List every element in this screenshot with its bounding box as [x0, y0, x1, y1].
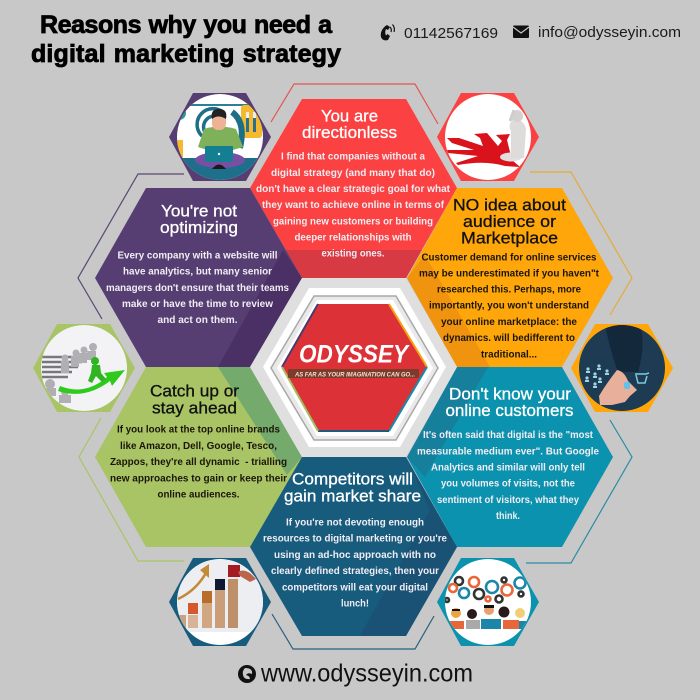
- heading: directionless: [302, 124, 397, 142]
- icon: rising bar chart: [169, 558, 271, 646]
- blue hexagon: [250, 457, 458, 637]
- logo hexagon: [282, 304, 427, 431]
- body text: think.: [496, 511, 520, 522]
- title: digital marketing strategy: [31, 40, 341, 68]
- body text: [256, 152, 451, 260]
- body text: deeper relationships with: [294, 232, 412, 244]
- panel: you're not optimizing: [95, 188, 303, 368]
- title: [31, 11, 341, 68]
- body text: using an ad-hoc approach with no: [274, 550, 436, 561]
- panel: catch up or stay ahead: [95, 367, 303, 547]
- body text: have analytics, but many senior: [123, 266, 272, 278]
- icon: person with laptop: [169, 93, 271, 181]
- heading: audience or: [463, 213, 557, 231]
- connector outlines: [78, 84, 632, 649]
- heading: optimizing: [160, 219, 238, 237]
- panel: you are directionless: [250, 99, 458, 280]
- heading: [453, 196, 566, 248]
- body text: I find that companies without a: [281, 152, 426, 162]
- orange hexagon: [407, 188, 614, 368]
- body text: researched this. Perhaps, more: [437, 284, 582, 296]
- red hexagon: [250, 99, 458, 280]
- body text: you volumes of visits, not the: [441, 478, 576, 490]
- body text: clearly defined strategies, then your: [271, 566, 439, 577]
- body text: [419, 252, 600, 360]
- icon: hand selecting customers: [571, 324, 673, 412]
- teal hexagon: [407, 367, 614, 547]
- heading: You're not: [161, 202, 237, 220]
- heading: gain market share: [284, 488, 421, 506]
- body text: don't have a clear strategic goal for what: [256, 184, 451, 195]
- body text: digital strategy (and many that do): [271, 168, 435, 179]
- heading: NO idea about: [453, 196, 566, 214]
- heading: [302, 108, 397, 142]
- body text: Customer demand for online services: [422, 252, 597, 264]
- email address: info@odysseyin.com: [538, 25, 681, 41]
- icon: green runner on arrow: [33, 324, 135, 412]
- panel: competitors will gain market share: [250, 457, 458, 637]
- contact: phone: [381, 24, 498, 42]
- heading: Competitors will: [292, 470, 413, 488]
- heading: [160, 202, 238, 237]
- heading: Catch up or: [150, 382, 240, 400]
- body text: new approaches to gain or keep their: [110, 474, 287, 484]
- body text: may be underestimated if you haven"t: [419, 268, 600, 280]
- icon: people and gears: [437, 558, 539, 646]
- panel: centre logo: [250, 278, 457, 457]
- panel: no idea about audience or marketplace: [407, 188, 614, 368]
- body text: If you're not devoting enough: [286, 518, 424, 528]
- body text: Every company with a website will: [118, 250, 278, 262]
- body text: Analytics and similar will only tell: [431, 462, 585, 474]
- heading: [284, 470, 421, 506]
- tagline band: [288, 369, 419, 378]
- body text: your online marketplace: the: [441, 317, 578, 328]
- logo wordmark: ODYSSEY: [299, 340, 410, 368]
- body text: It's often said that digital is the "most: [423, 430, 594, 441]
- tagline band: AS FAR AS YOUR IMAGINATION CAN GO...: [294, 372, 415, 378]
- heading: Don't know your: [449, 386, 572, 404]
- body text: Zappos, they're all dynamic - trialling: [110, 457, 287, 468]
- heading: You are: [321, 108, 378, 126]
- website address: www.odysseyin.com: [260, 660, 473, 688]
- title: Reasons why you need a: [40, 11, 333, 39]
- body text: managers don't ensure that their teams: [106, 283, 290, 294]
- body text: and act on them.: [158, 315, 238, 326]
- body text: existing ones.: [322, 248, 385, 260]
- body text: [417, 430, 600, 522]
- body text: traditional...: [481, 350, 537, 360]
- body text: resources to digital marketing or you're: [263, 534, 448, 544]
- body text: gaining new customers or building: [273, 216, 433, 228]
- heading: stay ahead: [152, 400, 237, 418]
- panel: don't know your online customers: [407, 367, 614, 547]
- body text: [110, 424, 287, 500]
- body text: dynamics. will bedifferent to: [443, 333, 575, 344]
- body text: lunch!: [341, 598, 369, 610]
- body text: importantly, you won't understand: [429, 300, 589, 312]
- body text: competitors will eat your digital: [282, 582, 428, 594]
- heading: [150, 382, 240, 418]
- body text: measurable medium ever". But Google: [417, 446, 600, 458]
- green hexagon: [95, 367, 303, 547]
- body text: [106, 250, 290, 326]
- heading: Marketplace: [461, 230, 558, 248]
- icon: odyssey logo mark: [238, 665, 256, 683]
- body text: they want to achieve online in terms of: [262, 200, 445, 211]
- contact: email: [513, 25, 681, 41]
- icon: phone: [381, 24, 394, 40]
- purple hexagon: [95, 188, 303, 368]
- heading: online customers: [446, 402, 574, 420]
- body text: like Amazon, Dell, Google, Tesco,: [120, 441, 277, 452]
- heading: [446, 386, 574, 420]
- icon: person at red crossroads: [437, 93, 539, 181]
- body text: online audiences.: [158, 490, 240, 500]
- body text: If you look at the top online brands: [117, 424, 281, 436]
- footer website: [238, 660, 473, 688]
- body text: make or have the time to review: [122, 299, 273, 310]
- phone number: 01142567169: [404, 26, 498, 42]
- icon: envelope: [513, 26, 529, 38]
- body text: [263, 518, 448, 610]
- body text: sentiment of visitors, what they: [437, 495, 580, 506]
